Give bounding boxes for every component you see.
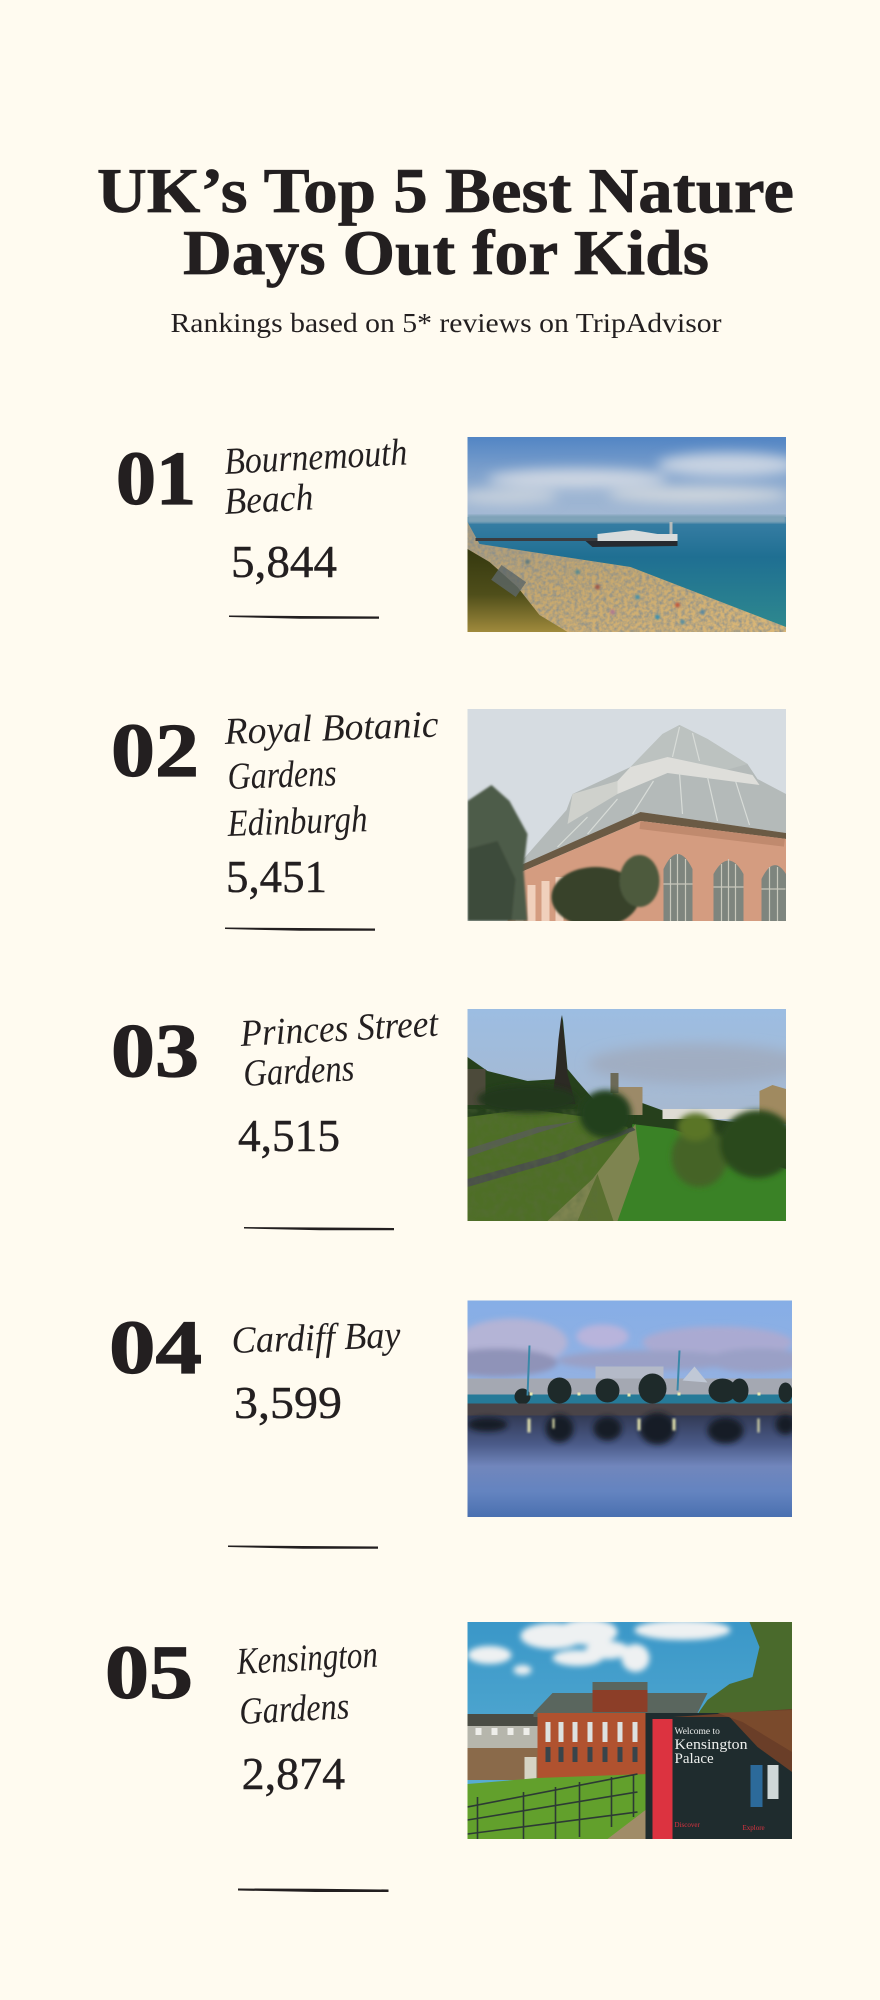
photo: Kensington Palace: Explore: [742, 1824, 765, 1832]
rank number 05: 05: [105, 1631, 193, 1715]
subtitle: Rankings based on 5* reviews on TripAdvisor: [170, 308, 722, 338]
photo: Kensington Palace: Welcome to: [674, 1727, 720, 1737]
place name: [223, 704, 439, 845]
panel: rank 03 Princes Street Gardens: [111, 1003, 808, 1321]
place name: Princes Street: [238, 1003, 441, 1055]
panel: rank 04 Cardiff Bay: [109, 1300, 808, 1549]
rank number 01: 01: [116, 437, 196, 521]
place name: Kensington: [235, 1634, 379, 1683]
title: UK’s Top 5 Best Nature: [97, 155, 794, 226]
place name: [235, 1634, 379, 1733]
review count: 2,874: [242, 1748, 345, 1799]
photo: gardens and Scott Monument: [468, 1009, 786, 1221]
place name: [238, 1003, 441, 1095]
review count: 3,599: [234, 1377, 342, 1428]
photo: Bournemouth beach and pier: [468, 437, 786, 632]
review count: 4,515: [238, 1110, 340, 1161]
photo: Cardiff Bay waterfront: [468, 1300, 792, 1517]
panel: rank 02 Royal Botanic Gardens Edinburgh: [111, 704, 786, 931]
title: Days Out for Kids: [183, 217, 709, 288]
place name: Edinburgh: [226, 798, 368, 845]
panel: rank 01 Bournemouth Beach: [116, 431, 798, 632]
review count: 5,844: [231, 536, 337, 587]
place name: Gardens: [242, 1047, 355, 1095]
rank number 03: 03: [111, 1010, 199, 1094]
photo: glasshouse: [468, 709, 786, 921]
photo: Kensington Palace: Kensington: [674, 1737, 748, 1753]
place name: Gardens: [238, 1685, 350, 1733]
divider stroke: [229, 616, 379, 619]
place name: [223, 431, 408, 523]
title: [97, 155, 794, 288]
divider stroke: [225, 928, 375, 931]
place name: Cardiff Bay: [231, 1314, 401, 1362]
place name: Bournemouth: [223, 431, 408, 483]
photo: Kensington Palace: Palace: [674, 1751, 714, 1767]
review count: 5,451: [226, 851, 327, 902]
divider stroke: [244, 1227, 394, 1230]
photo: Kensington Palace: Discover: [674, 1821, 700, 1829]
panel: rank 05 Kensington Gardens: [105, 1619, 792, 1892]
divider stroke: [238, 1888, 388, 1892]
rank number 04: 04: [109, 1306, 202, 1390]
place name: Royal Botanic: [223, 704, 439, 753]
rank number 02: 02: [111, 709, 199, 793]
photo: Kensington Palace: [468, 1622, 792, 1839]
place name: Beach: [223, 476, 314, 523]
place name: Gardens: [227, 752, 337, 798]
divider stroke: [228, 1546, 378, 1549]
